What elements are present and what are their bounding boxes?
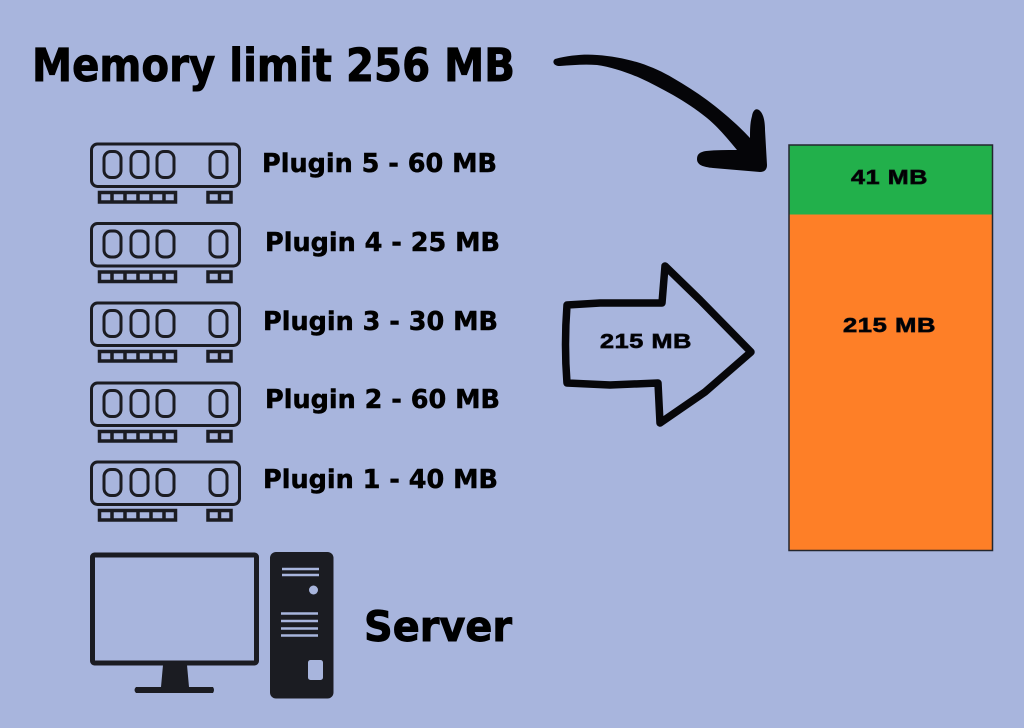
icon: RAM module — [92, 224, 240, 282]
row: plugin 2 — [92, 383, 500, 441]
arrow: plugins total: 215 MB — [600, 331, 692, 353]
title: Memory limit 256 MB — [32, 39, 515, 92]
row: plugin 2: Plugin 2 - 60 MB — [265, 385, 500, 415]
used memory segment — [789, 214, 992, 550]
row: plugin 3: Plugin 3 - 30 MB — [263, 307, 498, 337]
arrow: plugins total — [566, 266, 751, 423]
server label: Server — [364, 602, 512, 651]
row: plugin 4: Plugin 4 - 25 MB — [265, 228, 500, 258]
used memory segment: 215 MB — [843, 315, 936, 337]
row: plugin 1 — [92, 462, 498, 520]
arrow: memory limit to bar — [553, 55, 767, 172]
free memory segment: 41 MB — [851, 167, 928, 189]
tower — [270, 552, 334, 698]
icon: RAM module — [92, 303, 240, 361]
icon: RAM module — [92, 462, 240, 520]
icon: server computer — [92, 552, 334, 698]
icon: RAM module — [92, 144, 240, 202]
row: plugin 4 — [92, 224, 500, 282]
memory bar — [789, 145, 992, 550]
row: plugin 1: Plugin 1 - 40 MB — [263, 465, 498, 495]
monitor — [92, 555, 256, 693]
row: plugin 5 — [92, 144, 497, 202]
row: plugin 5: Plugin 5 - 60 MB — [262, 149, 497, 179]
icon: RAM module — [92, 383, 240, 441]
row: plugin 3 — [92, 303, 498, 361]
free memory segment — [789, 145, 992, 214]
